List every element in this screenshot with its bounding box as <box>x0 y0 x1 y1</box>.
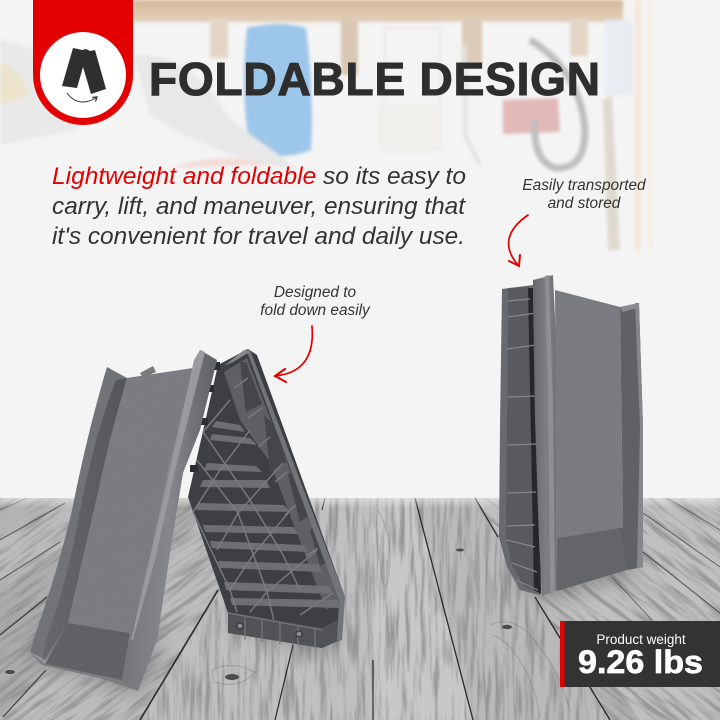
ramp shadows <box>30 555 645 695</box>
floor top fade <box>0 490 720 508</box>
product weight badge <box>560 621 720 687</box>
screw holes <box>237 623 302 637</box>
front rail <box>533 275 557 596</box>
title: FOLDABLE DESIGN <box>149 53 600 105</box>
wood grain <box>0 498 720 720</box>
right rail <box>618 303 643 570</box>
hinge knobs <box>190 362 220 472</box>
wooden floor <box>0 490 720 720</box>
dark pockets on side strip <box>240 362 330 566</box>
rib lattice <box>193 378 333 625</box>
arrow: to upright ramp <box>509 215 528 266</box>
arrow: to hinge <box>275 326 312 382</box>
product weight badge: 9.26 lbs <box>578 644 703 680</box>
plank gaps <box>0 498 720 720</box>
callout: transport and storage <box>522 177 646 212</box>
folded ramp standing upright <box>499 275 643 596</box>
underside body <box>188 349 345 648</box>
lip outer edge <box>30 652 138 691</box>
product weight badge: Product weight <box>596 632 686 647</box>
right rail <box>122 350 217 691</box>
intro paragraph: it's convenient for travel and daily use. <box>52 223 465 250</box>
bottom lip <box>45 623 130 680</box>
folded-open ramp: top surface <box>30 350 217 691</box>
bottom cell block <box>228 612 342 648</box>
header badge <box>33 0 133 125</box>
callout: fold down: fold down easily <box>260 302 371 319</box>
white circle <box>40 32 126 118</box>
icon: folded ramp <box>62 48 106 102</box>
grit panel <box>555 290 623 538</box>
intro paragraph: carry, lift, and maneuver, ensuring that <box>52 193 466 220</box>
red ribbon <box>33 0 133 125</box>
far rail tip <box>140 366 156 378</box>
side frame <box>499 285 540 595</box>
intro paragraph <box>52 163 466 250</box>
wood knots <box>212 510 570 718</box>
inner side strip <box>224 358 340 610</box>
dark cells <box>506 287 538 592</box>
callout: fold down <box>260 284 371 319</box>
light stripes in triangle cells <box>196 421 340 608</box>
callout: fold down: Designed to <box>274 284 357 301</box>
callout: transport and storage: and stored <box>548 195 621 212</box>
ribs <box>507 299 538 590</box>
folded-open ramp: underside panel <box>188 349 345 648</box>
bottom lip <box>557 528 627 591</box>
callout: transport and storage: Easily transported <box>522 177 646 194</box>
outer rim <box>246 349 345 642</box>
intro paragraph: Lightweight and foldable so its easy to <box>52 163 466 190</box>
left rail outer <box>30 367 127 660</box>
grit panel <box>68 368 193 633</box>
left inner wall <box>42 378 127 662</box>
